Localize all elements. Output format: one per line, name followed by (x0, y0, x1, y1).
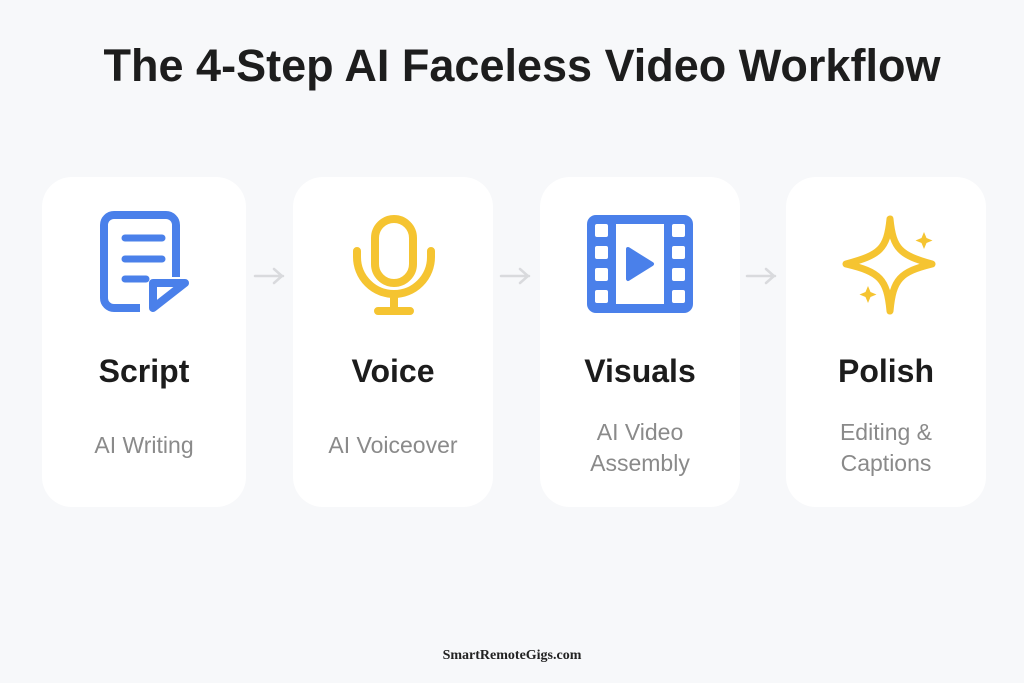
subtitle (840, 419, 932, 476)
subtitle: Editing & (840, 419, 932, 445)
heading: Script (99, 353, 189, 389)
icon: sparkle (842, 216, 936, 314)
subtitle: Assembly (590, 450, 690, 476)
subtitle: AI Video (597, 419, 683, 445)
panel: visuals (540, 177, 740, 507)
subtitle: Captions (841, 450, 931, 476)
heading: Voice (352, 353, 434, 389)
panel: script (42, 177, 246, 507)
footer: SmartRemoteGigs.com (443, 648, 581, 663)
subtitle: AI Writing (94, 432, 194, 458)
arrow (500, 268, 530, 284)
subtitle: AI Voiceover (328, 432, 458, 458)
heading: Polish (838, 353, 934, 389)
arrow (254, 268, 284, 284)
icon: document (100, 211, 189, 312)
icon: microphone (353, 215, 435, 315)
title: The 4-Step AI Faceless Video Workflow (104, 40, 940, 91)
heading: Visuals (584, 353, 696, 389)
arrow (746, 268, 776, 284)
icon: film (587, 215, 693, 313)
panel: voice (293, 177, 493, 507)
subtitle (590, 419, 690, 476)
panel: polish (786, 177, 986, 507)
